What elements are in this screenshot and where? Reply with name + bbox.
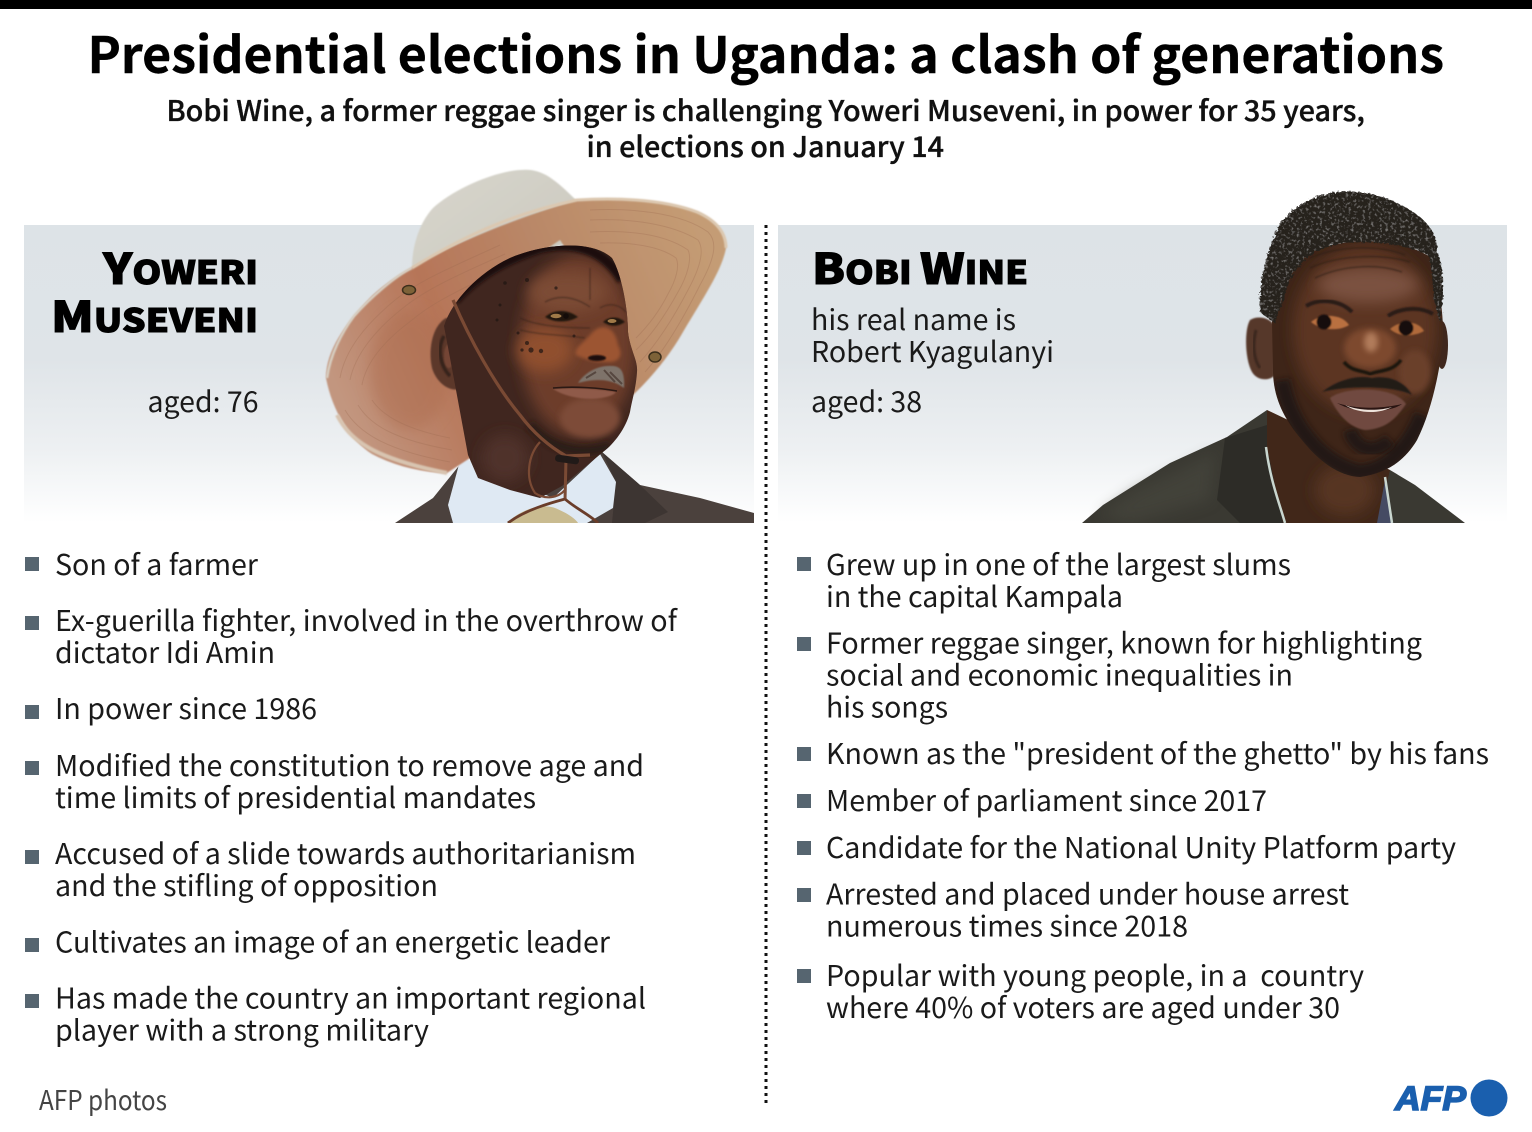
portrait: Bobi Wine [1082,191,1465,523]
panel: Bobi Wine header [778,191,1507,523]
head and neck [444,246,638,498]
hair [1260,191,1443,323]
candidate name: Yoweri Museveni: YOWERI [102,236,258,297]
warm brim shade near ear [368,318,440,430]
brow wrinkles [520,268,626,338]
right ear [1439,321,1448,369]
shirt [448,454,616,523]
title: Presidential elections in Uganda: a clash of generations [88,16,1444,88]
fact 5: and the stifling of opposition [55,864,438,905]
fact 1: in the capital Kampala [826,575,1123,616]
brim eyelets [402,286,416,294]
strap toggle [555,454,579,465]
fact 5 [25,832,636,905]
skin spots [496,278,576,353]
eyes [1311,314,1424,336]
real name: his real name is [811,298,1016,339]
fact 2: Ex-guerilla fighter, involved in the overthrow of [55,599,679,640]
centre dotted divider [764,225,768,1106]
fact 2: dictator Idi Amin [55,631,275,672]
fact 7: Popular with young people, in a country [826,954,1364,995]
fact 7: where 40% of voters are aged under 30 [826,986,1340,1027]
forehead tone [1318,267,1418,303]
lapel [1217,425,1285,523]
brim stitching [340,210,714,462]
face tone [520,255,636,435]
moustache [1322,377,1412,395]
fact 2: his songs [826,686,948,726]
fact 2 [25,599,679,672]
face [1272,241,1443,477]
fact 2 [797,622,1422,726]
tie [507,506,578,523]
list: Bobi Wine facts [797,543,1489,1027]
fact 1 [797,543,1291,616]
eyes [545,311,578,322]
fact 4: Modified the constitution to remove age and [55,744,644,785]
fact 3: In power since 1986 [55,687,317,728]
candidate name: Bobi Wine: BOBI WINE [812,236,1028,297]
fact 6 [797,872,1349,946]
age: 76: aged: 76 [148,380,258,421]
panel: Yoweri Museveni header [24,170,754,523]
ear [430,317,456,390]
fact 4: time limits of presidential mandates [55,776,536,817]
neck [1267,410,1390,523]
mouth [1330,390,1406,430]
fact 7: player with a strong military [55,1008,429,1050]
forehead [528,272,608,312]
nose [576,327,620,362]
fact 7 [797,954,1364,1027]
fact 3: Known as the "president of the ghetto" by his fans [826,732,1489,773]
brows [1306,301,1433,316]
AFP logo [1394,1080,1508,1118]
chin strap [453,300,590,456]
mouth [553,388,616,399]
left ear [1246,317,1274,379]
fact 1: Grew up in one of the largest slums [826,543,1291,584]
real name [811,298,1054,371]
AFP logo: AFP [1394,1080,1466,1118]
lapel shade [602,452,668,523]
fact 6: Cultivates an image of an energetic leader [55,920,611,962]
hat crown [412,169,576,266]
subtitle: in elections on January 14 [586,125,944,166]
jacket [1082,410,1465,523]
subtitle [166,89,1365,166]
fact 4: Member of parliament since 2017 [826,779,1267,820]
strap loops [508,499,598,523]
list: Museveni facts [25,543,679,1050]
portrait: Museveni in a wide-brimmed hat [326,170,754,523]
face tone [1293,245,1437,415]
hat brim [326,199,726,473]
shirt and lanyard [1377,480,1393,523]
nose [1344,328,1396,368]
photo credit: AFP photos [39,1079,167,1118]
jacket [395,452,754,523]
real name: Robert Kyagulanyi [811,330,1054,371]
cheek [517,328,573,372]
jaw shadow [530,425,610,450]
fact 7 [25,976,646,1050]
right cheek [1399,350,1431,394]
lower face [560,398,620,438]
moustache [578,366,624,388]
fact 6: numerous times since 2018 [826,904,1188,946]
candidate name: Yoweri Museveni [51,236,258,345]
fact 1: Son of a farmer [55,543,259,584]
fact 5: Accused of a slide towards authoritarianism [55,832,636,873]
neck tone [481,434,529,482]
top black bar [0,0,1532,9]
fact 4 [25,744,644,817]
subtitle: Bobi Wine, a former reggae singer is challenging Yoweri Museveni, in power for 35 years, [166,89,1365,130]
candidate name: Yoweri Museveni: MUSEVENI [51,284,258,345]
beard stubble [1282,380,1422,472]
fact 7: Has made the country an important regional [55,976,646,1018]
hat line shadow [455,245,622,300]
forehead wrinkles [1310,248,1410,278]
fact 5: Candidate for the National Unity Platform party [826,826,1456,867]
age: 38: aged: 38 [811,380,922,421]
jacket shoulder highlight [1098,468,1200,508]
brim edge highlight [412,199,726,268]
fact 6: Arrested and placed under house arrest [826,872,1349,914]
fact 2: Former reggae singer, known for highlighting [826,622,1422,662]
fact 2: social and economic inequalities in [826,654,1293,694]
